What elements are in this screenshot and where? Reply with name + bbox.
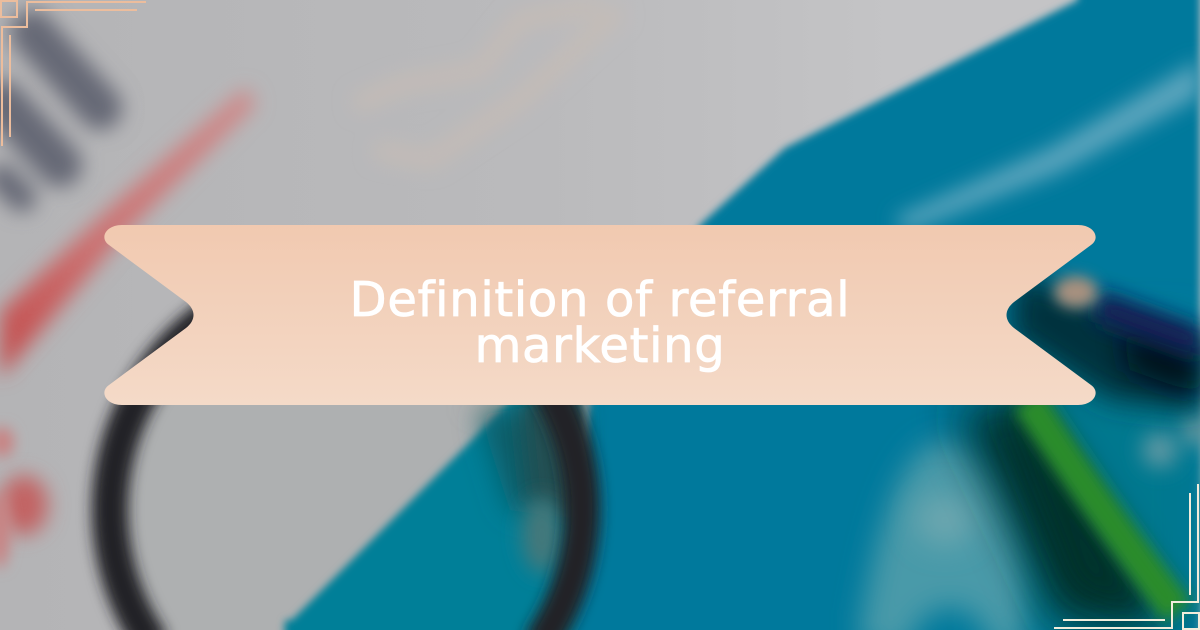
lens ring	[110, 274, 582, 630]
title: Definition of referral marketing	[350, 272, 850, 374]
pale disc on sheet	[860, 440, 1026, 630]
light stripe on sheet	[895, 60, 1200, 232]
bottom-right corner ornament	[1054, 484, 1200, 630]
dark bars	[2, 32, 100, 198]
red marks	[0, 475, 48, 535]
blue pencil	[1095, 292, 1200, 358]
teal sheet	[560, 0, 1200, 630]
peach scribble	[355, 5, 620, 160]
red stripe	[0, 88, 256, 378]
green pencil	[1028, 400, 1178, 612]
pencil shadows	[1010, 270, 1200, 410]
lens interior	[110, 270, 582, 630]
top-left corner ornament	[0, 0, 146, 146]
